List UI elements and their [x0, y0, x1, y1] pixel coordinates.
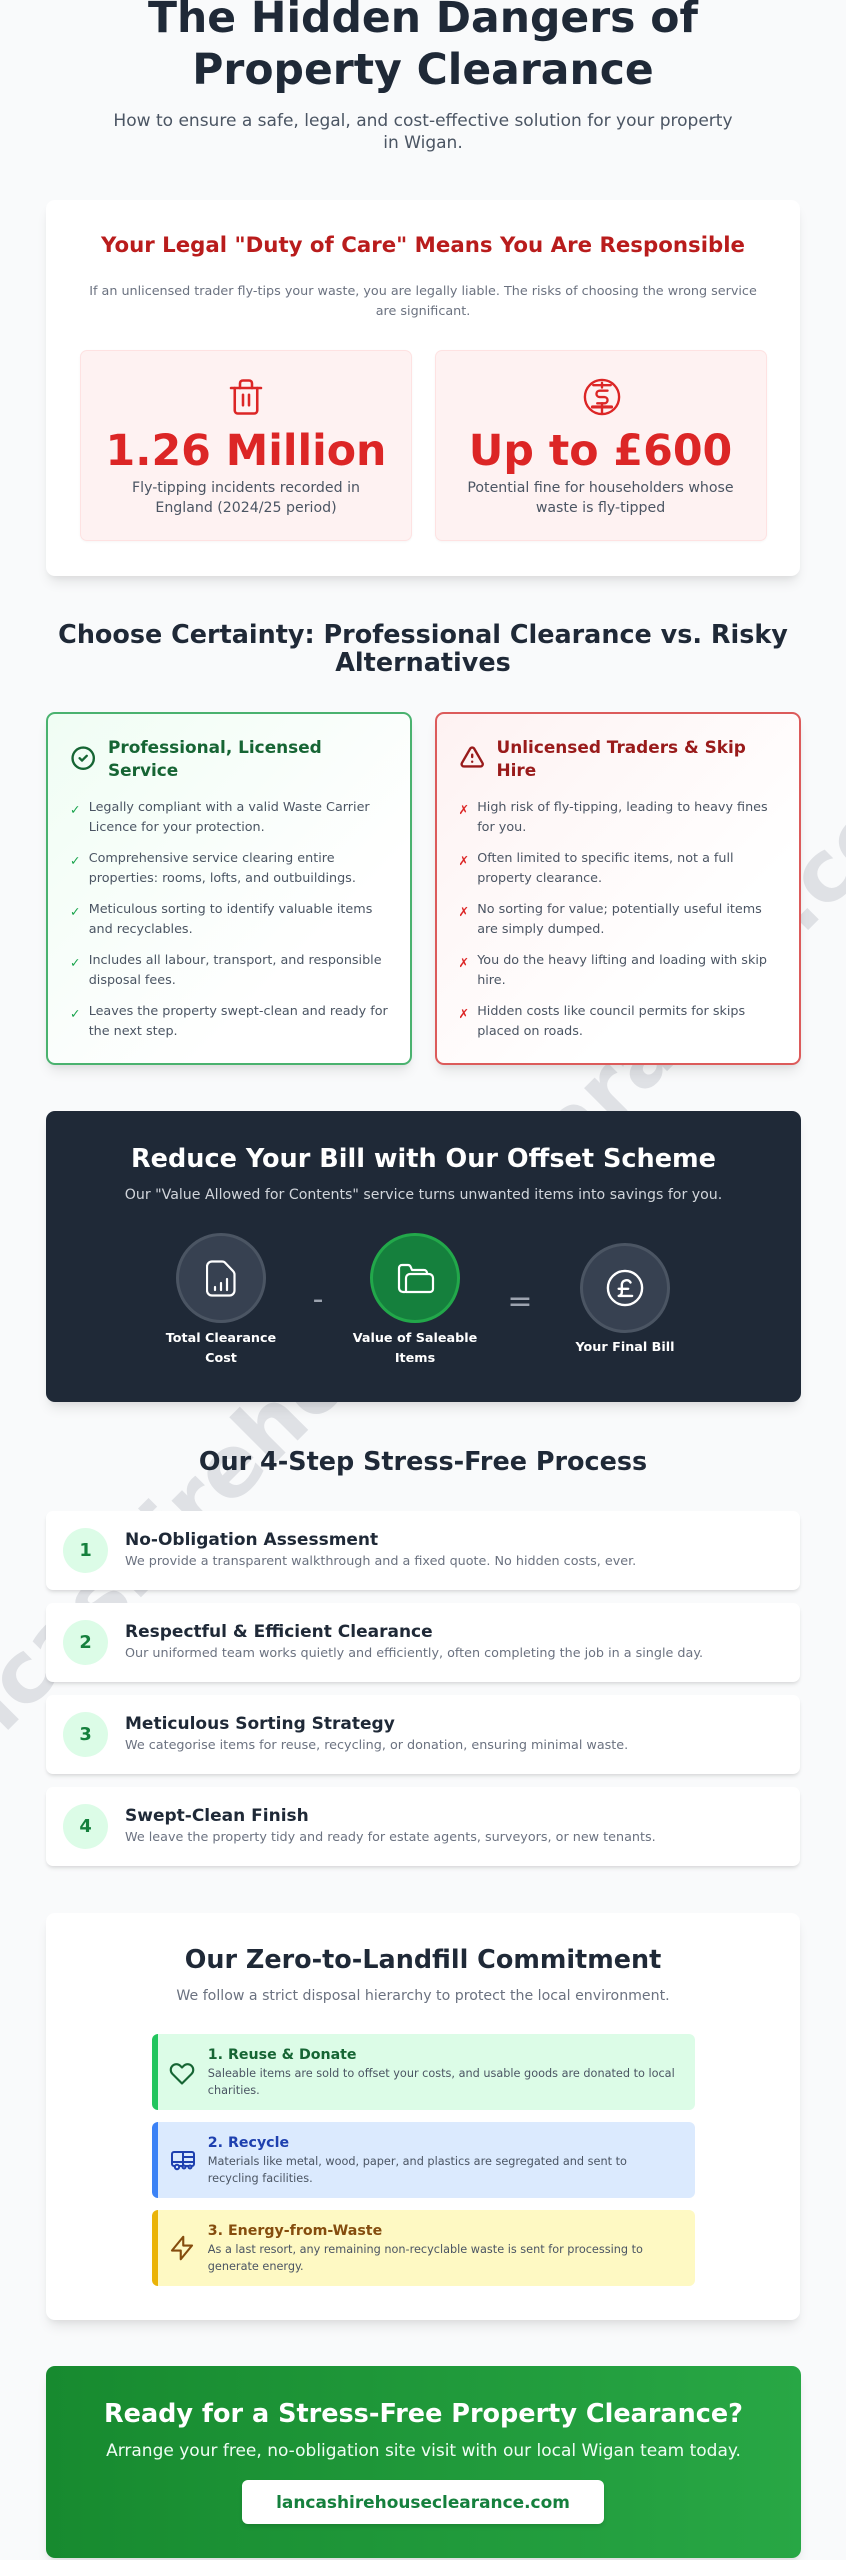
panel: call to action	[46, 2366, 801, 2558]
list item: ✗	[458, 853, 469, 868]
list item: ✗	[458, 802, 469, 817]
list item: hire.	[477, 973, 506, 988]
list item: the next step.	[89, 1024, 178, 1039]
label: Value of Saleable	[353, 1331, 477, 1346]
list item: Meticulous sorting to identify valuable items	[89, 902, 372, 917]
heading: zero to landfill: Our Zero-to-Landfill Commitment	[185, 1945, 661, 1975]
step description: We provide a transparent walkthrough and a fixed quote. No hidden costs, ever.	[125, 1554, 636, 1569]
list item	[458, 851, 734, 886]
stat caption	[132, 480, 360, 516]
step number	[63, 1620, 108, 1665]
heading: unlicensed: Unlicensed Traders & Skip	[496, 737, 746, 757]
icon: lightning bolt	[170, 2236, 194, 2260]
label	[166, 1331, 276, 1366]
tier description	[208, 2067, 675, 2097]
list item	[70, 851, 356, 886]
step title: Respectful & Efficient Clearance	[125, 1622, 433, 1642]
text: call to action: Arrange your free, no-obligation site visit with our local Wigan team today.	[106, 2440, 741, 2460]
label: Your Final Bill	[575, 1340, 675, 1355]
step number	[63, 1528, 108, 1573]
step number: 3	[79, 1724, 92, 1745]
heading: professional: Service	[108, 760, 178, 780]
panel: offset scheme	[46, 1111, 801, 1402]
icon circle: document chart	[176, 1233, 266, 1323]
tier description: generate energy.	[208, 2260, 304, 2273]
list item: properties: rooms, lofts, and outbuildings.	[89, 871, 356, 886]
stat caption: waste is fly-tipped	[536, 500, 665, 516]
stat caption: England (2024/25 period)	[155, 500, 337, 516]
icon: recycling truck	[171, 2151, 195, 2170]
heading: comparison: Choose Certainty: Professional Clearance vs. Risky	[58, 620, 788, 650]
list item: ✗	[458, 1006, 469, 1021]
stat card: fine	[434, 350, 766, 541]
step 4	[46, 1787, 800, 1866]
step number: 4	[79, 1816, 92, 1837]
label: Cost	[205, 1350, 237, 1366]
heading: comparison	[58, 620, 788, 678]
step description: We leave the property tidy and ready for estate agents, surveyors, or new tenants.	[125, 1830, 656, 1845]
heading: duty of care: Your Legal "Duty of Care" Means You Are Responsible	[101, 233, 745, 258]
label: Items	[395, 1350, 435, 1366]
tier description	[208, 2155, 627, 2185]
list item: disposal fees.	[89, 973, 176, 988]
heading: offset scheme: Reduce Your Bill with Our Offset Scheme	[131, 1144, 716, 1174]
button: website: lancashirehouseclearance.com	[276, 2492, 570, 2512]
list item: Often limited to specific items, not a full	[477, 851, 734, 866]
tier description	[208, 2243, 643, 2273]
step description: We categorise items for reuse, recycling, or donation, ensuring minimal waste.	[125, 1738, 628, 1753]
subtitle	[113, 110, 733, 152]
operator: equals: =	[507, 1284, 533, 1319]
list item: placed on roads.	[477, 1024, 583, 1039]
icon: trash can	[230, 379, 262, 415]
stat number: 1.26 Million: 1.26 Million	[106, 426, 386, 476]
subtitle: in Wigan.	[383, 132, 463, 152]
list item	[458, 800, 768, 835]
tier: reuse and donate	[152, 2034, 695, 2110]
tier description: Saleable items are sold to offset your costs, and usable goods are donated to local	[208, 2067, 675, 2080]
list: unlicensed risks	[458, 800, 768, 1039]
list item: ✗	[458, 904, 469, 919]
list item: ✗	[458, 955, 469, 970]
tier description: recycling facilities.	[208, 2172, 313, 2185]
list item: Comprehensive service clearing entire	[89, 851, 335, 866]
text: liability warning	[89, 284, 757, 319]
step number: 2	[79, 1632, 92, 1653]
panel: zero to landfill	[46, 1913, 800, 2320]
heading: unlicensed: Hire	[496, 760, 536, 780]
step 1	[46, 1511, 800, 1590]
list item: No sorting for value; potentially useful items	[477, 902, 762, 917]
heading: process: Our 4-Step Stress-Free Process	[199, 1447, 647, 1477]
list item: Legally compliant with a valid Waste Carrier	[89, 800, 370, 815]
list item: Hidden costs like council permits for skips	[477, 1004, 745, 1019]
label: Total Clearance	[166, 1331, 276, 1346]
stat card: fly-tipping incidents	[80, 350, 412, 541]
tier title: 1. Reuse & Donate	[208, 2047, 357, 2063]
step description: Our uniformed team works quietly and efficiently, often completing the job in a single day.	[125, 1646, 703, 1661]
heading: unlicensed	[496, 737, 746, 780]
list item: Licence for your protection.	[89, 820, 265, 835]
list item: Includes all labour, transport, and responsible	[89, 953, 382, 968]
text: liability warning: If an unlicensed trader fly-tips your waste, you are legally liable. The risks of choosing the wrong service	[89, 284, 757, 299]
list: professional benefits	[70, 800, 388, 1039]
heading: call to action: Ready for a Stress-Free Property Clearance?	[104, 2399, 743, 2429]
list item: and recyclables.	[89, 922, 193, 937]
panel: duty of care	[46, 200, 800, 576]
list item	[70, 953, 382, 988]
list item: ✓	[70, 1006, 80, 1021]
list item	[70, 902, 372, 937]
icon circle: folders	[370, 1233, 460, 1323]
tier description: Materials like metal, wood, paper, and plastics are segregated and sent to	[208, 2155, 627, 2168]
panel: professional service	[46, 712, 412, 1065]
heading: comparison: Alternatives	[335, 648, 511, 678]
list item	[458, 953, 767, 988]
tier description: charities.	[208, 2084, 260, 2097]
stat caption: Potential fine for householders whose	[467, 480, 734, 496]
tier description: As a last resort, any remaining non-recyclable waste is sent for processing to	[208, 2243, 643, 2256]
list item: ✓	[70, 802, 80, 817]
heading: professional: Professional, Licensed	[108, 737, 322, 757]
icon: warning triangle	[460, 746, 484, 768]
icon: dollar coin	[584, 378, 620, 416]
list item: You do the heavy lifting and loading with skip	[477, 953, 767, 968]
equation item: final bill	[575, 1243, 675, 1355]
step title: No-Obligation Assessment	[125, 1530, 378, 1550]
panel: unlicensed traders	[434, 712, 801, 1065]
icon circle: pound coin	[580, 1243, 670, 1333]
icon: check circle	[71, 746, 95, 770]
stat caption: Fly-tipping incidents recorded in	[132, 480, 360, 496]
list item	[70, 1004, 388, 1039]
step title: Swept-Clean Finish	[125, 1806, 309, 1826]
button: website	[242, 2480, 604, 2524]
title	[148, 0, 698, 95]
text: hierarchy description: We follow a strict disposal hierarchy to protect the local environment.	[176, 1988, 670, 2004]
list item	[458, 902, 762, 937]
icon: heart	[170, 2063, 194, 2085]
list item: High risk of fly-tipping, leading to heavy fines	[477, 800, 768, 815]
step 2	[46, 1603, 800, 1682]
heading: professional	[108, 737, 322, 780]
stat number: Up to £600: Up to £600	[469, 426, 732, 476]
text: liability warning: are significant.	[376, 304, 470, 319]
list item: Leaves the property swept-clean and ready for	[89, 1004, 388, 1019]
list item: ✓	[70, 853, 80, 868]
equation item: value of saleable items	[352, 1233, 477, 1366]
operator: minus: -	[313, 1282, 323, 1317]
step number: 1	[79, 1540, 92, 1561]
tier: energy from waste	[152, 2210, 695, 2286]
tier: recycle	[152, 2122, 695, 2198]
list item: for you.	[477, 820, 526, 835]
title: Property Clearance	[192, 46, 654, 95]
list item: ✓	[70, 904, 80, 919]
step 3	[46, 1695, 800, 1774]
list item: ✓	[70, 955, 80, 970]
list item: property clearance.	[477, 871, 602, 886]
list item: are simply dumped.	[477, 922, 604, 937]
tier title: 2. Recycle	[208, 2135, 289, 2151]
step number	[63, 1804, 108, 1849]
tier title: 3. Energy-from-Waste	[208, 2223, 382, 2239]
list item	[458, 1004, 745, 1039]
equation item: total clearance cost	[166, 1233, 276, 1366]
stat caption	[467, 480, 734, 516]
list item	[70, 800, 370, 835]
subtitle: How to ensure a safe, legal, and cost-effective solution for your property	[113, 110, 733, 130]
step number	[63, 1712, 108, 1757]
step title: Meticulous Sorting Strategy	[125, 1714, 395, 1734]
text: offset description: Our "Value Allowed for Contents" service turns unwanted items into savings for you.	[125, 1187, 722, 1203]
label	[352, 1331, 477, 1366]
